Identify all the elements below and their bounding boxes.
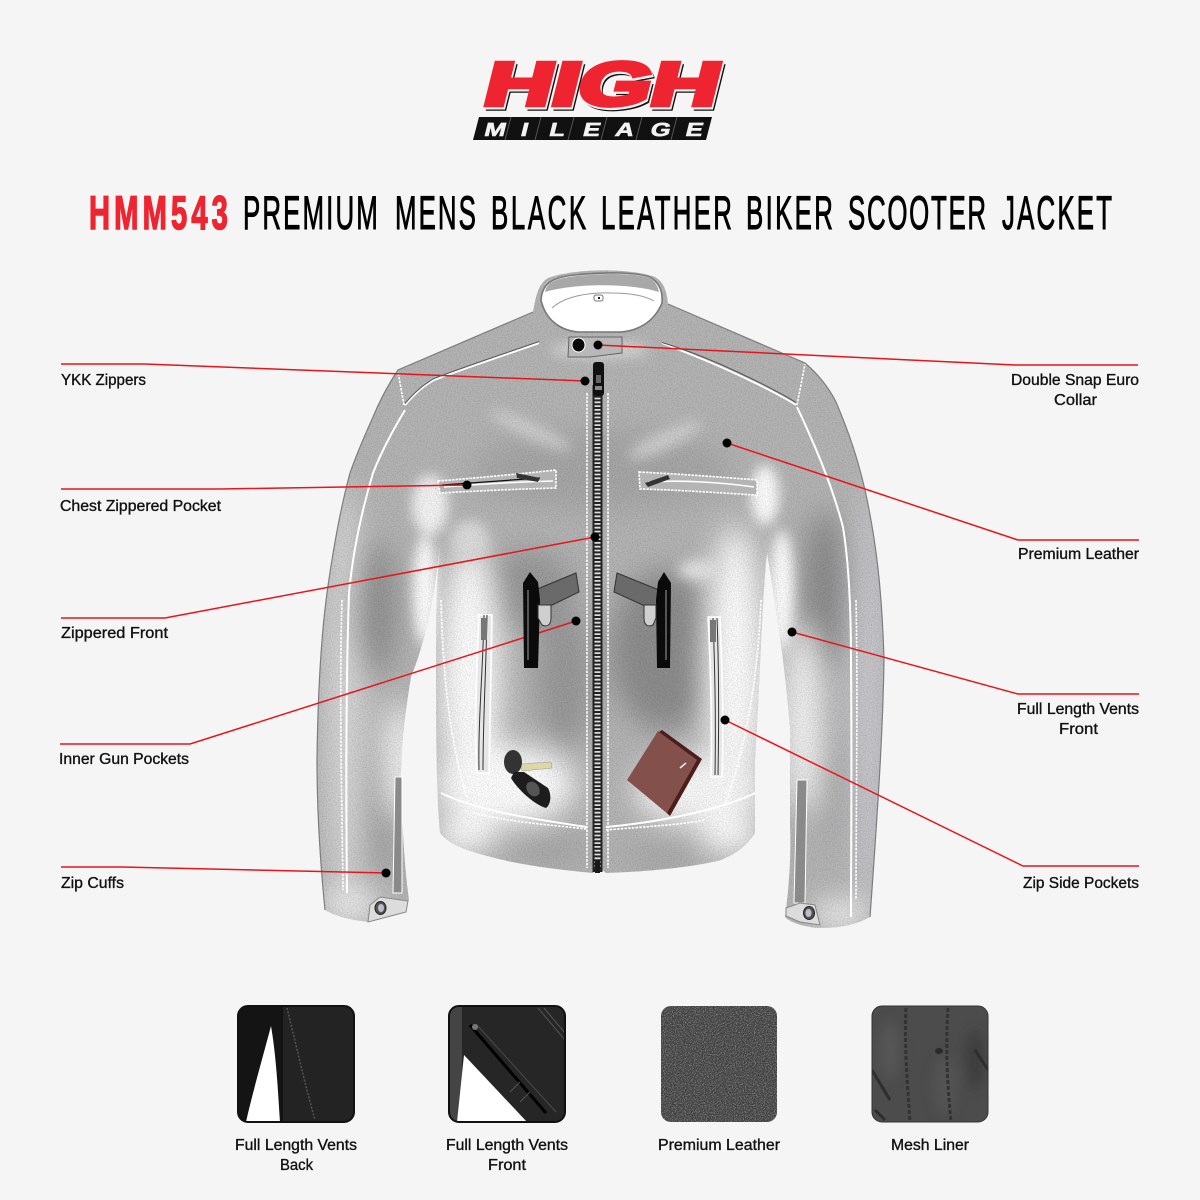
callout dots xyxy=(382,340,796,878)
seams xyxy=(341,342,857,917)
title product name: MENS xyxy=(395,188,476,240)
label: Zip Cuffs: Zip Cuffs xyxy=(61,875,124,892)
center zipper xyxy=(587,362,608,873)
right sleeve cuff and vent xyxy=(786,780,820,925)
line: Inner Gun Pockets xyxy=(60,621,576,744)
label: Chest Zippered Pocket: Chest Zippered Pocket xyxy=(60,498,222,515)
logo wordmark HIGH: HIGH xyxy=(478,51,729,119)
label: Mesh Liner xyxy=(891,1137,969,1154)
collar snap tab xyxy=(568,337,622,357)
logo wordmark HIGH: HIGH xyxy=(480,54,731,122)
left sleeve cuff and vent xyxy=(368,777,408,922)
label: Zippered Front: Zippered Front xyxy=(61,625,169,642)
title product name: LEATHER xyxy=(601,188,732,240)
title product name xyxy=(243,188,1112,240)
jacket outline xyxy=(317,304,884,917)
panel: Full Length Vents Front xyxy=(446,1006,568,1174)
right chest pocket xyxy=(639,472,757,495)
label: Full Length Vents xyxy=(446,1137,568,1154)
line: Premium Leather xyxy=(727,443,1139,540)
label: Premium Leather xyxy=(658,1137,780,1154)
thumbnail: liner texture xyxy=(872,1006,988,1122)
label xyxy=(235,1137,357,1174)
title product name: SCOOTER xyxy=(848,188,986,240)
panel: Premium Leather xyxy=(658,1006,780,1154)
label: Double Snap Euro Collar xyxy=(1011,372,1139,409)
title product name: PREMIUM xyxy=(243,188,378,240)
logo wordmark HIGH: HIGH xyxy=(479,53,730,121)
title product name: BIKER xyxy=(746,188,833,240)
label: Back xyxy=(280,1157,313,1174)
line: Zip Side Pockets xyxy=(725,720,1139,866)
line: Zip Cuffs xyxy=(61,867,386,873)
label: YKK Zippers: YKK Zippers xyxy=(61,372,146,389)
title xyxy=(89,188,1112,240)
title code: HMM543 xyxy=(89,188,228,240)
logo: High Mileage xyxy=(473,51,731,140)
line: YKK Zippers xyxy=(61,364,585,381)
label: Double Snap Euro Collar: Double Snap Euro xyxy=(1011,372,1139,389)
title product name: BLACK xyxy=(491,188,586,240)
callout labels xyxy=(59,372,1139,892)
collar xyxy=(541,273,662,332)
icon: left pistol xyxy=(523,572,579,668)
left chest pocket xyxy=(438,470,556,493)
line: Chest Zippered Pocket xyxy=(61,485,467,489)
label: Premium Leather: Premium Leather xyxy=(1018,546,1139,563)
line: Full Length Vents Front xyxy=(792,632,1139,694)
jacket shading xyxy=(300,260,900,940)
line: Double Snap Euro Collar xyxy=(598,345,1138,365)
thumbnail: front vent xyxy=(449,1006,565,1122)
jacket illustration xyxy=(300,260,900,940)
label: Full Length Vents xyxy=(235,1137,357,1154)
feature thumbnails xyxy=(235,1006,988,1174)
label: Double Snap Euro Collar: Collar xyxy=(1054,392,1097,409)
thumbnail: back vent xyxy=(238,1006,354,1122)
panel: Full Length Vents Back xyxy=(235,1006,357,1174)
panel: Mesh Liner xyxy=(872,1006,988,1154)
label: Inner Gun Pockets: Inner Gun Pockets xyxy=(59,751,189,768)
icon: right pistol xyxy=(614,572,671,668)
right side pocket xyxy=(708,617,723,777)
label: Full Length Vents Front: Full Length Vents xyxy=(1017,701,1139,718)
label: Zip Side Pockets: Zip Side Pockets xyxy=(1023,875,1139,892)
left side pocket xyxy=(476,615,492,773)
label: Full Length Vents Front: Front xyxy=(1059,721,1099,738)
logo bar MILEAGE: MILEAGE xyxy=(482,119,706,140)
line: Zippered Front xyxy=(61,537,595,618)
thumbnail: leather texture xyxy=(661,1006,777,1122)
label xyxy=(446,1137,568,1174)
callout lines xyxy=(60,345,1139,873)
label: Full Length Vents Front xyxy=(1017,701,1139,738)
logo wordmark HIGH xyxy=(478,51,731,122)
title product name: JACKET xyxy=(1002,188,1112,240)
icon: car key xyxy=(504,750,552,808)
label: Front xyxy=(488,1157,527,1174)
icon: brown wallet xyxy=(627,730,702,816)
